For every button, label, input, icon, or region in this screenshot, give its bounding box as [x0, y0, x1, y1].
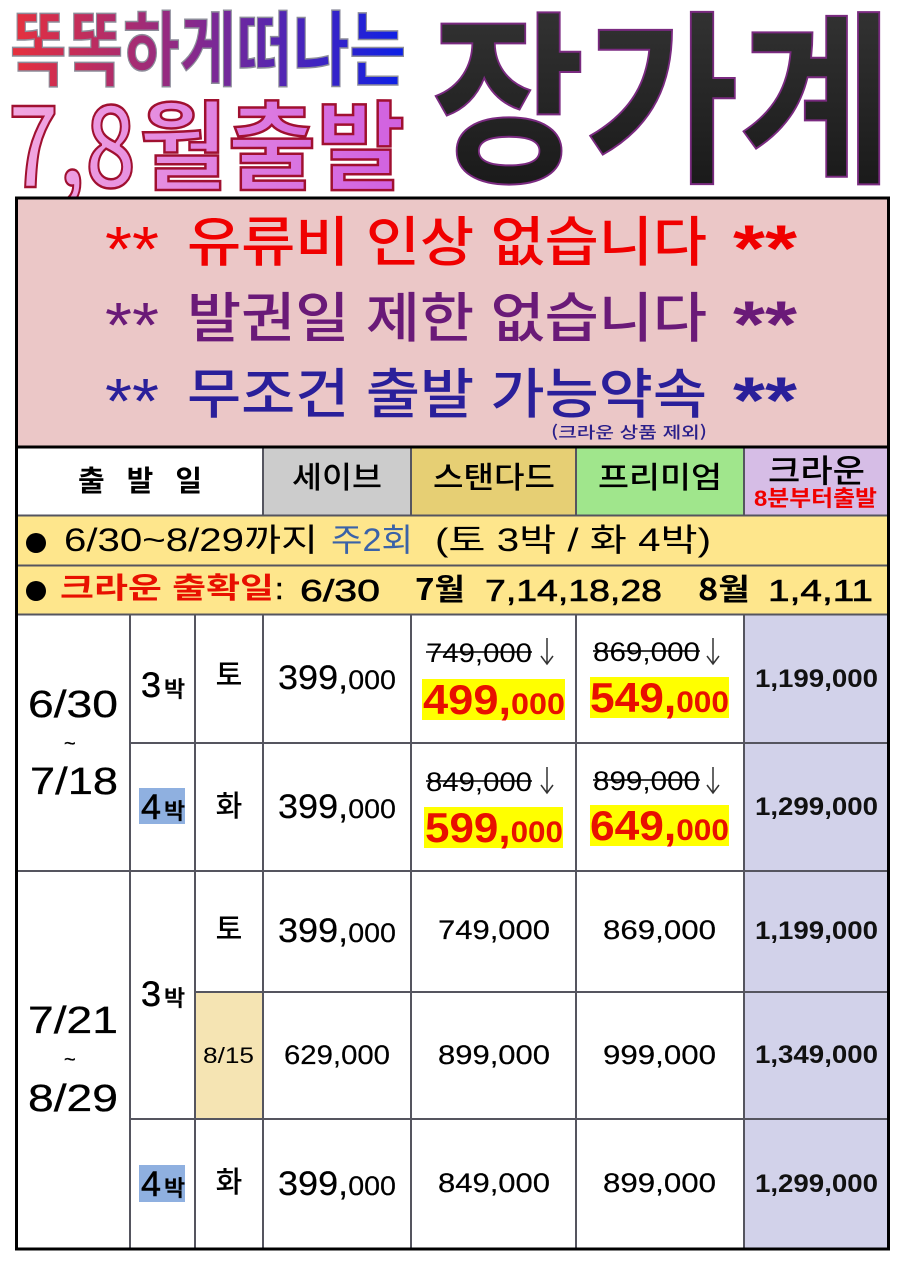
info row: crown departure dates: 7,14,18,28 — [485, 573, 662, 608]
info row: schedule: (토 3박 / 화 4박) — [435, 522, 711, 558]
table header: 세이브 — [292, 462, 382, 495]
price table — [17, 448, 888, 1249]
weekdays — [203, 660, 254, 1199]
notice: guaranteed departure — [105, 350, 797, 437]
info row: schedule: 주2회 — [331, 522, 413, 558]
save prices: 399,000 — [278, 659, 396, 697]
nights: 4 — [141, 788, 161, 827]
info row: crown departure dates — [17, 565, 888, 614]
info row: crown departure dates: 6/30 — [300, 573, 380, 608]
date ranges — [28, 684, 118, 1120]
standard and premium prices — [438, 915, 716, 1198]
info row: crown departure dates: 크라운 출확일 — [60, 565, 274, 607]
standard and premium prices: 899,000 — [603, 1168, 716, 1198]
panel: notice banner — [17, 198, 888, 446]
date ranges: ~ — [64, 733, 76, 755]
nights: 박 — [164, 794, 185, 826]
notice: no ticketing limit — [105, 274, 797, 361]
table header: 크라운 — [768, 453, 865, 489]
note: excluding crown: (크라운 상품 제외) — [551, 419, 707, 443]
crown prices: 1,349,000 — [755, 1041, 878, 1069]
notice: no fuel surcharge increase — [105, 198, 797, 285]
info row: crown departure dates: 1,4,11 — [768, 573, 873, 608]
title: July August departure: 7,8 — [8, 59, 136, 219]
notice: no fuel surcharge increase: 유류비 인상 없습니다 — [187, 198, 707, 277]
table header: 프리미엄 — [598, 462, 722, 495]
save prices: 399,000 — [278, 788, 396, 826]
save prices — [278, 659, 396, 1203]
standard and premium prices: 999,000 — [603, 1040, 716, 1070]
info row: schedule: 6/30~8/29까지 — [64, 522, 318, 558]
notice: no ticketing limit: 발권일 제한 없습니다 — [187, 274, 707, 353]
crown prices — [755, 665, 878, 1198]
nights: 박 — [164, 672, 185, 704]
weekdays: 8/15 — [203, 1043, 254, 1068]
crown prices: 1,299,000 — [755, 1170, 878, 1198]
weekdays: 화 — [216, 791, 242, 823]
struck original prices — [426, 637, 700, 797]
standard and premium prices: 849,000 — [438, 1168, 550, 1198]
save prices: 629,000 — [284, 1040, 390, 1070]
date ranges: 7/18 — [30, 761, 118, 803]
table header — [78, 448, 888, 515]
crown prices: 1,299,000 — [755, 793, 878, 821]
weekdays: 토 — [216, 914, 242, 946]
info row: crown departure dates: 8월 — [698, 565, 750, 609]
outer frame — [16, 198, 888, 1249]
discounted prices: 599,000 — [425, 804, 563, 851]
nights: 4 — [141, 1165, 161, 1204]
struck original prices: 899,000 — [593, 766, 700, 796]
grid lines — [17, 448, 888, 1249]
notice: guaranteed departure: ** — [105, 365, 159, 437]
nights: 박 — [164, 1171, 185, 1203]
struck original prices: 869,000 — [593, 637, 700, 667]
weekdays: 토 — [216, 660, 242, 692]
notice: no ticketing limit: ** — [105, 289, 159, 361]
save prices: 399,000 — [278, 912, 396, 950]
crown prices: 1,199,000 — [755, 917, 878, 945]
nights — [141, 666, 185, 1204]
discounted prices — [423, 674, 729, 851]
nights: 박 — [164, 981, 185, 1013]
date ranges: 8/29 — [28, 1078, 118, 1120]
discounted prices: 649,000 — [590, 802, 729, 849]
crown prices: 1,199,000 — [755, 665, 878, 693]
save prices: 399,000 — [278, 1165, 396, 1203]
discounted prices: 549,000 — [590, 674, 729, 721]
notice: no fuel surcharge increase: ** — [105, 213, 159, 285]
date ranges: 7/21 — [28, 1000, 118, 1042]
struck original prices: 749,000 — [426, 638, 532, 668]
nights: 3 — [141, 666, 161, 705]
notice: no fuel surcharge increase: ** — [733, 211, 797, 285]
date ranges: ~ — [64, 1049, 76, 1071]
struck original prices: 849,000 — [426, 767, 532, 797]
standard and premium prices: 749,000 — [438, 915, 550, 945]
nights: 3 — [141, 975, 161, 1014]
weekdays: 화 — [216, 1167, 242, 1199]
table header: 스탠다드 — [433, 462, 555, 495]
table header: 출 발 일 — [78, 465, 202, 498]
info row: crown departure dates: : — [275, 571, 284, 606]
notice: no ticketing limit: ** — [733, 287, 797, 361]
info row: schedule — [17, 516, 888, 565]
discounted prices: 499,000 — [423, 676, 565, 723]
standard and premium prices: 869,000 — [603, 915, 716, 945]
date ranges: 6/30 — [28, 684, 118, 726]
table header: 8분부터출발 — [754, 486, 877, 511]
notice: guaranteed departure: 무조건 출발 가능약속 — [187, 350, 707, 429]
info row: crown departure dates: 7월 — [415, 565, 465, 609]
title: July August departure — [8, 59, 405, 219]
standard and premium prices: 899,000 — [438, 1040, 550, 1070]
title: July August departure: 월출발 — [139, 69, 405, 210]
notice: guaranteed departure: ** — [733, 363, 797, 437]
icon: down arrows — [541, 638, 719, 793]
